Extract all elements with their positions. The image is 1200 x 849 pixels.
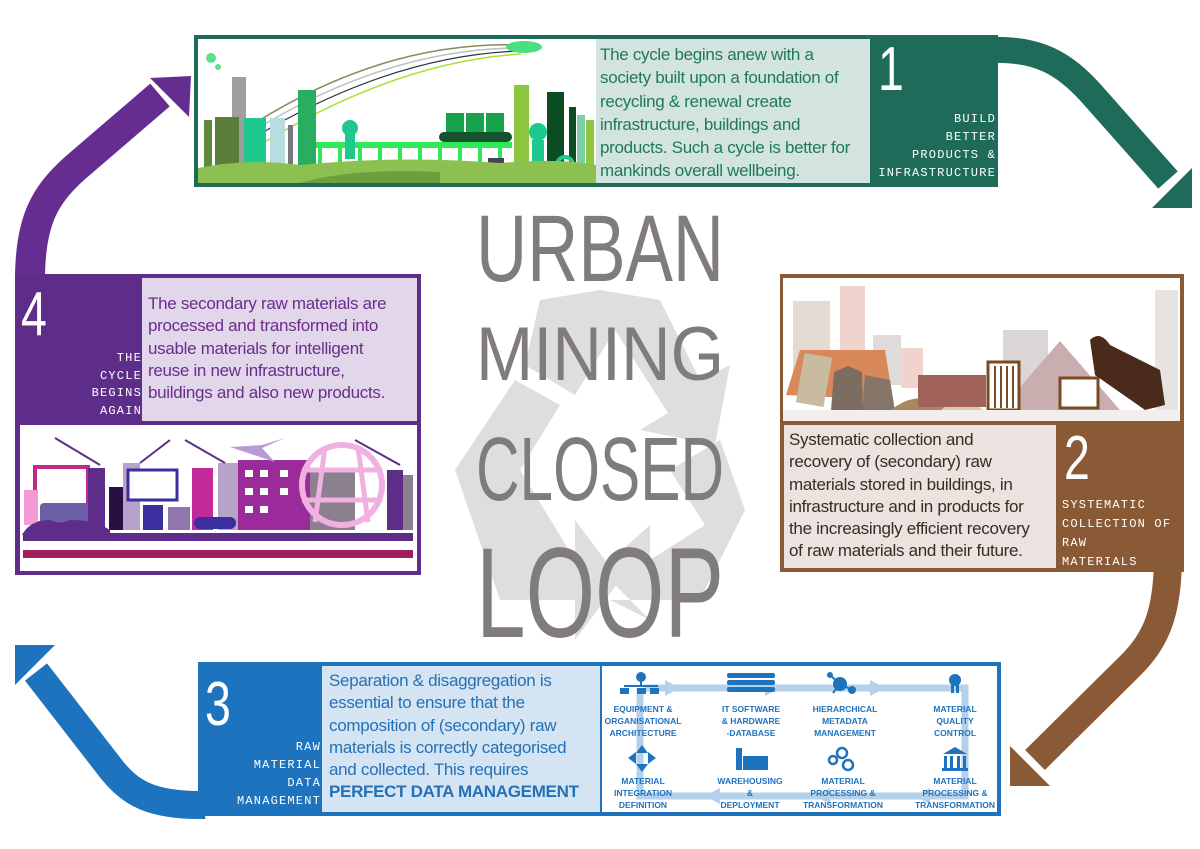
text block: panel 2 description: of raw materials and their future.: [789, 541, 1023, 560]
arrow: brown (2 to 3): [1010, 555, 1168, 786]
chart: data management flow: DEPLOYMENT: [720, 800, 780, 810]
text block: panel 3 description: PERFECT DATA MANAGEMENT: [329, 782, 579, 801]
chart: data management flow: DEFINITION: [619, 800, 667, 810]
chart: data management flow: EQUIPMENT &: [613, 704, 673, 714]
text block: panel 2 description: materials stored in buildings, in: [789, 475, 1012, 494]
number 3: 3: [205, 670, 231, 739]
text block: panel 3 description: materials is correctly categorised: [329, 738, 566, 757]
chart: data management flow: HIERARCHICAL: [813, 704, 877, 714]
chart: data management flow: &: [747, 788, 753, 798]
text block: panel 2 description: recovery of (secondary) raw: [789, 452, 992, 471]
text block: panel 3 description: [322, 666, 600, 812]
arrow: purple (4 to 1): [30, 76, 191, 280]
text block: panel 1 description: infrastructure, buildings and: [600, 115, 800, 134]
chart: data management flow: TRANSFORMATION: [915, 800, 995, 810]
number 2: 2: [1064, 424, 1090, 493]
text block: panel 1 description: society built upon a foundation of: [600, 68, 838, 87]
label: build better products & infrastructure: PRODUCTS &: [912, 148, 996, 162]
text block: panel 2 description: the increasingly efficient recovery: [789, 519, 1030, 538]
text block: panel 1 description: The cycle begins anew with a: [600, 45, 814, 64]
icon: database servers: [727, 673, 775, 692]
text block: panel 4 description: The secondary raw materials are: [148, 294, 386, 313]
label: the cycle begins again: CYCLE: [100, 368, 142, 382]
label: build better products & infrastructure: BUILD: [954, 112, 996, 126]
number 1: 1: [878, 35, 904, 104]
chart: data management flow: & HARDWARE: [722, 716, 781, 726]
text block: panel 1 description: recycling & renewal create: [600, 92, 792, 111]
label: raw material data management: [237, 740, 321, 808]
title: URBAN MINING CLOSED LOOP: URBAN: [476, 196, 724, 302]
text block: panel 2 description: infrastructure and in products for: [789, 497, 1024, 516]
text block: panel 2 description: [784, 425, 1056, 568]
label: raw material data management: DATA: [287, 776, 321, 790]
icon: gears: [829, 748, 853, 770]
text block: panel 3 description: essential to ensure that the: [329, 693, 525, 712]
chart: data management flow: MATERIAL: [821, 776, 865, 786]
arrow: green (1 to 2): [990, 50, 1192, 208]
label: the cycle begins again: AGAIN: [100, 404, 142, 418]
chart: data management flow: IT SOFTWARE: [722, 704, 780, 714]
label: the cycle begins again: BEGINS: [92, 386, 142, 400]
illustration: waste and city: [783, 278, 1180, 421]
chart: data management flow: [602, 666, 997, 812]
chart: data management flow: METADATA: [822, 716, 868, 726]
label: build better products & infrastructure: BETTER: [946, 130, 996, 144]
chart: data management flow: CONTROL: [934, 728, 976, 738]
illustration: purple city: [20, 425, 417, 571]
icon: warehouse: [736, 748, 768, 770]
chart: data management flow: PROCESSING &: [922, 788, 988, 798]
icon: network node: [828, 673, 855, 693]
chart: data management flow: MATERIAL: [621, 776, 665, 786]
label: systematic collection of raw materials: [1062, 498, 1171, 569]
text block: panel 3 description: and collected. This requires: [329, 760, 528, 779]
icon: recycle symbol: [455, 290, 745, 640]
icon: integration arrows: [628, 745, 656, 772]
title: URBAN MINING CLOSED LOOP: MINING: [476, 312, 724, 397]
text block: panel 1 description: [596, 39, 870, 183]
chart: data management flow: MATERIAL: [933, 704, 977, 714]
chart: data management flow: MANAGEMENT: [814, 728, 877, 738]
illustration: green city: [198, 39, 596, 183]
label: the cycle begins again: THE: [117, 351, 142, 365]
label: systematic collection of raw materials: MATERIALS: [1062, 555, 1138, 569]
text block: panel 4 description: [142, 278, 417, 421]
text block: panel 3 description: composition of (secondary) raw: [329, 716, 556, 735]
title: URBAN MINING CLOSED LOOP: LOOP: [476, 522, 724, 665]
text block: panel 4 description: usable materials for intelligent: [148, 339, 363, 358]
chart: data management flow: ARCHITECTURE: [609, 728, 677, 738]
title: URBAN MINING CLOSED LOOP: CLOSED: [476, 420, 724, 520]
label: raw material data management: MATERIAL: [254, 758, 321, 772]
chart: data management flow: -DATABASE: [727, 728, 776, 738]
label: the cycle begins again: [92, 351, 142, 418]
label: raw material data management: RAW: [296, 740, 321, 754]
panel 4: cycle begins again: [15, 274, 421, 575]
label: build better products & infrastructure: [878, 112, 996, 180]
text block: panel 4 description: processed and transformed into: [148, 316, 378, 335]
text block: panel 1 description: products. Such a cycle is better for: [600, 138, 850, 157]
label: systematic collection of raw materials: RAW: [1062, 536, 1087, 550]
chart: data management flow: ORGANISATIONAL: [605, 716, 681, 726]
chart: data management flow: TRANSFORMATION: [803, 800, 883, 810]
text block: panel 1 description: mankinds overall wellbeing.: [600, 161, 800, 180]
chart: data management flow: WAREHOUSING: [717, 776, 783, 786]
text block: panel 2 description: Systematic collection and: [789, 430, 973, 449]
title: URBAN MINING CLOSED LOOP: [476, 196, 724, 665]
chart: data management flow: QUALITY: [936, 716, 974, 726]
chart: data management flow: INTEGRATION: [614, 788, 672, 798]
icon: quality badge: [949, 674, 961, 693]
label: build better products & infrastructure: INFRASTRUCTURE: [878, 166, 996, 180]
panel 1: build better products: [194, 35, 998, 187]
panel 2: systematic collection: [780, 274, 1184, 572]
text block: panel 3 description: Separation & disaggregation is: [329, 671, 552, 690]
label: systematic collection of raw materials: COLLECTION OF: [1062, 517, 1171, 531]
text block: panel 4 description: reuse in new infrastructure,: [148, 361, 345, 380]
icon: org chart: [620, 672, 659, 694]
text block: panel 4 description: buildings and also new products.: [148, 383, 385, 402]
chart: data management flow: MATERIAL: [933, 776, 977, 786]
arrow: blue (3 to 4): [15, 645, 205, 805]
number 4: 4: [21, 280, 47, 349]
chart: data management flow: PROCESSING &: [810, 788, 876, 798]
icon: institution: [942, 747, 968, 771]
panel 3: raw material data management: [198, 662, 1001, 816]
label: raw material data management: MANAGEMENT: [237, 794, 321, 808]
label: systematic collection of raw materials: SYSTEMATIC: [1062, 498, 1146, 512]
